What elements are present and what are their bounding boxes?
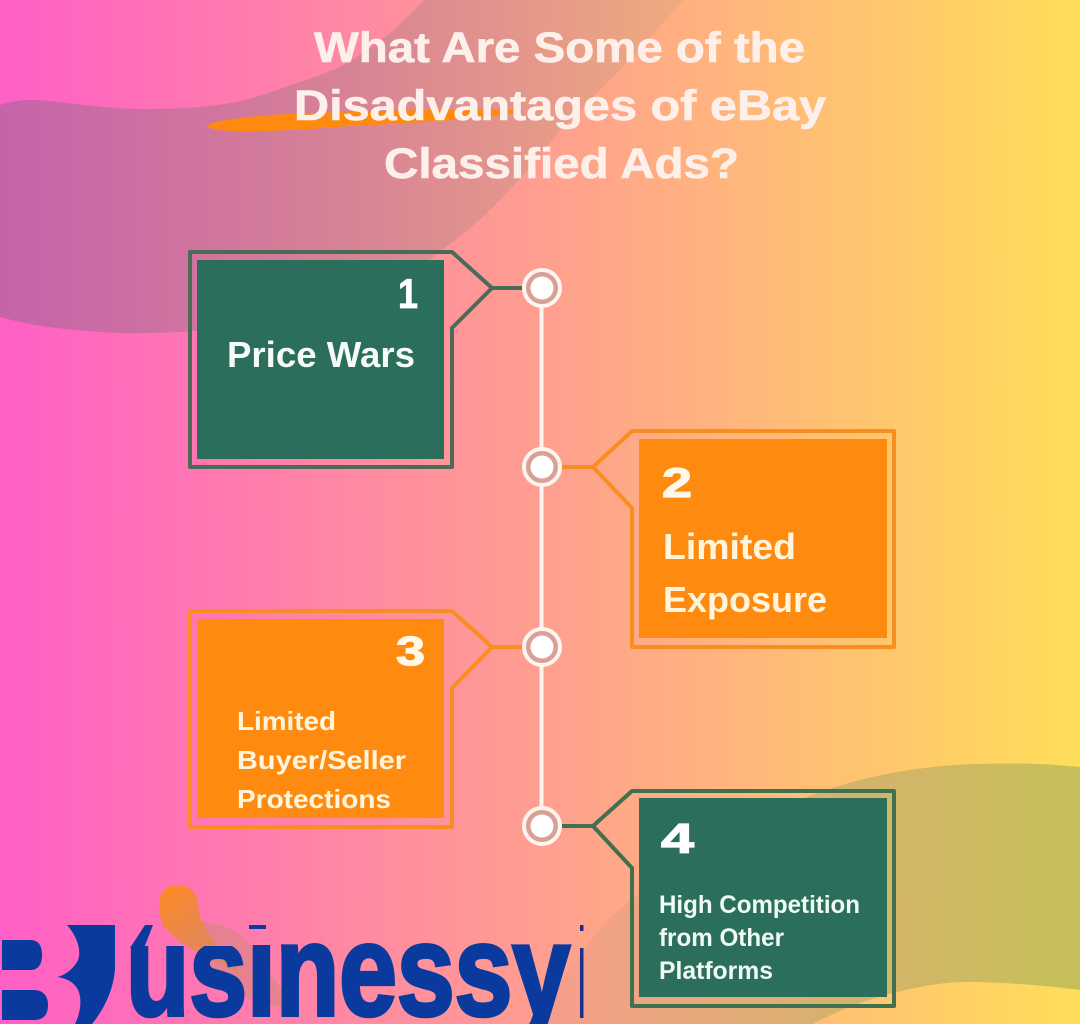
- logo: Businessy: [2, 885, 584, 1024]
- text: High Competition from Other Platforms: from Other: [659, 924, 784, 952]
- number 3: 3: [396, 628, 425, 674]
- logo i bar: [249, 925, 266, 929]
- text: High Competition from Other Platforms: High Competition: [659, 891, 860, 919]
- title: What Are Some of the: [314, 24, 805, 72]
- text: Limited Buyer/Seller Protections: [237, 706, 406, 814]
- number 4: 4: [661, 815, 695, 862]
- logo letter B: [2, 925, 115, 1024]
- logo accent mark: [130, 925, 153, 948]
- text: Limited Buyer/Seller Protections: Limited: [237, 706, 336, 736]
- logo decoration: orange drop: [159, 885, 246, 978]
- panel 2: Limited Exposure: [560, 431, 894, 647]
- logo thin letter i: [580, 925, 584, 1018]
- title: [294, 24, 826, 188]
- logo decoration: tan swoosh: [198, 922, 296, 1010]
- panel 1: Price Wars: [190, 252, 524, 467]
- number 2: 2: [662, 459, 692, 506]
- text: Limited Exposure: Limited: [663, 526, 796, 567]
- text: Limited Exposure: [663, 526, 827, 620]
- background blob: bottom right: [528, 763, 1080, 1024]
- timeline node 2: [524, 449, 560, 485]
- text: Limited Buyer/Seller Protections: Protections: [237, 784, 391, 814]
- timeline node 1: [524, 270, 560, 306]
- accent stroke behind title: [207, 109, 522, 131]
- text: High Competition from Other Platforms: Platforms: [659, 957, 773, 985]
- panel 3: Limited Buyer/Seller Protections: [190, 611, 524, 827]
- timeline vertical line: [540, 288, 544, 826]
- number 1: 1: [398, 270, 418, 317]
- title: Disadvantages of eBay: [294, 82, 826, 130]
- panel 4: High Competition from Other Platforms: [560, 791, 894, 1006]
- timeline node 4: [524, 808, 560, 844]
- text: Limited Exposure: Exposure: [663, 579, 827, 620]
- title: Classified Ads?: [384, 140, 739, 188]
- text: Limited Buyer/Seller Protections: Buyer/Seller: [237, 745, 406, 775]
- text: Price Wars: Price Wars: [227, 334, 415, 375]
- text: High Competition from Other Platforms: [659, 891, 860, 985]
- background blob: top left: [0, 0, 683, 333]
- timeline node 3: [524, 629, 560, 665]
